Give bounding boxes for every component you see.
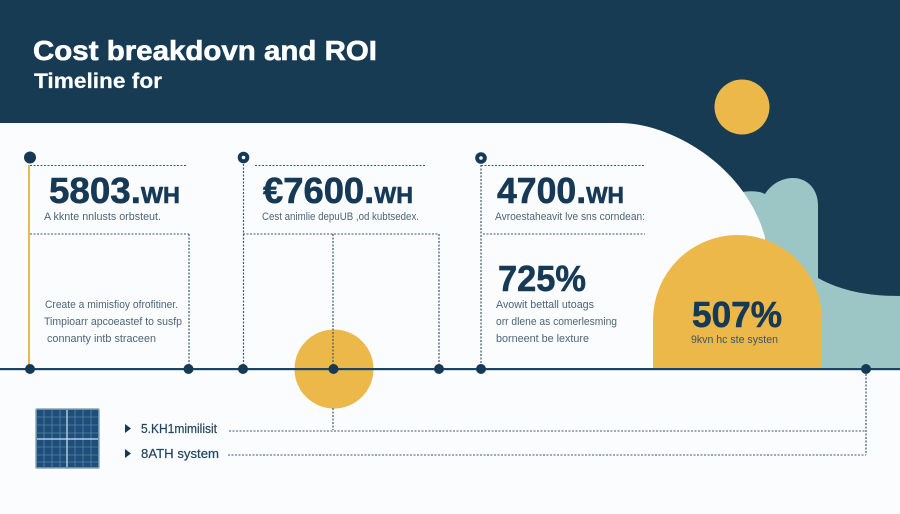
shape: teal hill xyxy=(735,178,900,369)
accent line xyxy=(28,165,30,369)
stat caption: Avroestaheavit lve sns corndean: xyxy=(495,211,645,223)
shape: yellow arch xyxy=(653,235,822,369)
icon: arrow xyxy=(125,424,131,433)
panel: second cost column xyxy=(240,154,439,369)
panel: white content area xyxy=(0,123,765,369)
legend label: 8ATH system xyxy=(141,446,219,461)
marker ring xyxy=(477,154,485,162)
panel: dark header background xyxy=(0,0,900,369)
timeline axis with nodes xyxy=(0,364,900,374)
title xyxy=(33,35,377,93)
marker ring xyxy=(240,154,247,161)
stat value: 5803.WH xyxy=(49,170,180,211)
callout caption: 9kvn hc ste systen xyxy=(691,334,778,346)
body text: orr dlene as comerlesming xyxy=(496,316,617,328)
body text xyxy=(496,299,617,345)
stat caption: Cest animlie depuUB ,od kubtsedex. xyxy=(262,211,419,223)
body text: Timpioarr apcoeastef to susfp xyxy=(44,316,182,328)
icon: yellow sun circle xyxy=(714,80,770,134)
percentage value: 507% xyxy=(692,294,782,335)
stat value: 4700.WH xyxy=(497,170,624,211)
body text xyxy=(44,299,182,345)
body text: connanty intb straceen xyxy=(47,333,156,345)
stat value: €7600.WH xyxy=(263,170,413,211)
legend label: 5.KH1mimilisit xyxy=(141,421,217,436)
heading: Cost breakdovn and ROI xyxy=(33,35,377,66)
body text: borneent be lexture xyxy=(496,333,589,345)
percentage value: 725% xyxy=(498,258,586,299)
legend: first item xyxy=(125,421,217,436)
body text: Create a mimisfioy ofrofitiner. xyxy=(45,299,178,311)
subheading: Timeline for xyxy=(34,70,162,93)
panel: first cost column xyxy=(24,152,189,369)
marker dot xyxy=(24,152,36,164)
icon: solar panel xyxy=(36,409,99,468)
legend: second item xyxy=(125,446,219,461)
icon: arrow xyxy=(125,449,131,458)
connector lines to legend xyxy=(228,374,866,455)
stat caption: A kknte nnlusts orbsteut. xyxy=(44,211,161,223)
callout: arch percentage xyxy=(691,294,782,346)
body text: Avowit bettall utoags xyxy=(496,299,594,311)
shape: large yellow circle on timeline xyxy=(294,330,374,408)
panel: third cost column xyxy=(477,154,645,369)
